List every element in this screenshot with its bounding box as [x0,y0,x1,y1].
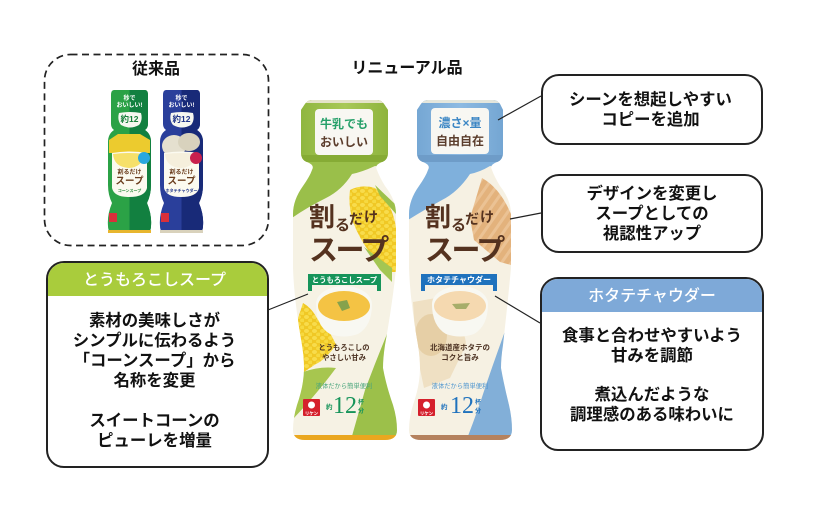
logo [418,399,435,417]
tagline: 液体だから簡単便利 [316,381,372,390]
cap label: おいしい [320,135,368,149]
name banner [421,274,497,291]
cap label [431,108,489,154]
tagline: 液体だから簡単便利 [432,381,488,390]
corn soup description: 名称を変更 [114,372,195,390]
brand title: だ [465,211,479,227]
brand title: だ [349,211,363,227]
old bottle: corn soup: コーンスープ [118,187,141,193]
cups: 約 [326,402,333,411]
brand title: け [480,209,494,225]
logo [303,399,320,417]
corn soup description: 素材の美味しさが [89,312,220,330]
tagline [430,342,490,390]
cups: 12 [333,393,357,419]
scallop chowder description: 甘みを調節 [611,347,693,365]
corn soup description: ピューレを増量 [97,432,212,450]
brand title [309,202,389,267]
brand title: 割 [425,202,451,232]
callout: design changed: 視認性アップ [603,225,701,243]
old bottle: corn soup: 割るだけ [117,168,142,176]
panel header: corn soup [48,263,267,296]
scallop chowder description: 調理感のある味わいに [570,406,734,424]
old bottle: scallop chowder: スープ [168,176,196,187]
old bottle: scallop chowder: おいしい! [168,102,195,109]
brand title: 割 [309,202,335,232]
heading: renewal products: リニューアル品 [351,60,463,77]
old bottle: corn soup: 秒で [123,94,136,102]
name banner [308,274,381,291]
cups: 分 [358,407,364,415]
cups: 杯 [358,398,364,406]
scallop chowder description [562,326,742,424]
cap label [315,109,373,155]
panel: corn soup [46,261,269,468]
corn soup description: スイートコーンの [89,412,220,430]
logo: リケン [305,410,319,417]
scallop chowder description: 食事と合わせやすいよう [562,327,742,345]
soup bowl [432,286,488,336]
panel header: scallop chowder [542,279,762,312]
brand title: スープ [425,234,505,267]
callout: copy added [541,74,763,145]
tagline: 北海道産ホタテの [430,342,490,352]
old bottle: corn soup: おいしい! [116,102,143,109]
cups [441,393,481,419]
old bottle: corn soup: スープ [116,176,144,187]
callout: design changed: スープとしての [595,205,709,223]
callout: design changed: デザインを変更し [586,185,718,203]
cap label: 自由自在 [436,133,484,148]
corn soup description [73,312,236,450]
old bottle: scallop chowder: 秒で [175,94,188,102]
soup bowl [316,286,372,336]
logo: リケン [420,410,434,417]
cups: 分 [475,407,481,415]
panel: scallop chowder [540,277,764,451]
bottle: scallop chowder renewal [409,100,512,440]
corn soup description: 「コーンスープ」から [74,352,235,370]
callout: design changed [541,174,763,253]
cups: 12 [450,393,474,419]
cap label: 濃さ×量 [438,115,482,130]
corn soup description: シンプルに伝わるよう [73,332,236,350]
old bottle: scallop chowder: ホタテチャウダー [166,187,197,193]
cups: 杯 [475,398,481,406]
name banner: とうもろこしスープ [312,276,378,284]
brand title: け [364,209,378,225]
old bottle: scallop chowder: 約12 [173,114,191,124]
cups: 約 [441,402,448,411]
cap label: 牛乳でも [320,116,368,131]
tagline: やさしい甘み [322,353,366,362]
tagline: コクと旨み [441,352,479,362]
old bottle: corn soup: 約12 [121,114,139,124]
callout: copy added: コピーを追加 [601,110,700,128]
bottle: corn soup renewal [293,100,397,440]
brand title: る [335,217,350,234]
callout: copy added: シーンを想起しやすい [569,91,732,109]
heading: previous products: 従来品 [132,61,180,78]
brand title: る [451,217,466,234]
panel header: scallop chowder: ホタテチャウダー [588,288,716,305]
brand title: スープ [309,234,389,267]
scallop chowder description: 煮込んだような [595,386,709,404]
brand title [425,202,505,267]
tagline [316,343,372,390]
name banner: ホタテチャウダー [427,274,491,284]
panel header: corn soup: とうもろこしスープ [83,272,226,289]
tagline: とうもろこしの [318,343,370,352]
old bottle: scallop chowder: 割るだけ [169,168,194,176]
cups [326,393,364,419]
